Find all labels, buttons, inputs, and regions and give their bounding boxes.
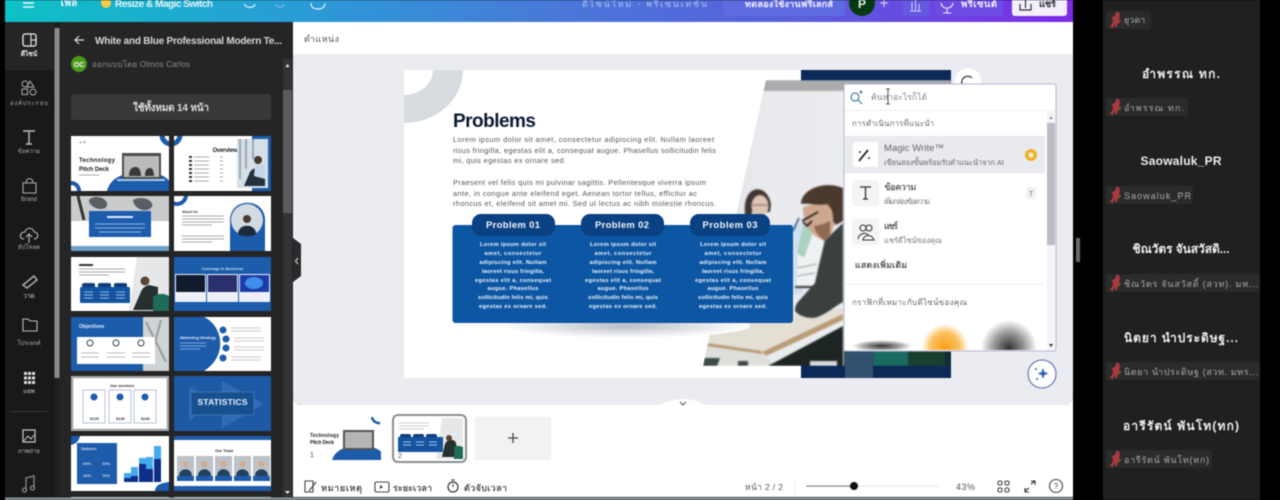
rail item: upload: [18, 228, 40, 251]
share button: [1012, 0, 1067, 16]
bottom bar background: [293, 405, 1073, 497]
bottom edge: [5, 498, 1073, 500]
thumbnail: statistics chart: 60%: [83, 461, 91, 466]
location bar: [293, 22, 1073, 54]
table: [707, 308, 843, 353]
card: problem 03: egestas elit a, consequat: [695, 278, 771, 284]
participants panel: [1103, 0, 1260, 500]
thumbnail: our services (selected): $120: [90, 416, 100, 421]
show more: แสดงเพิ่มเติม: [855, 258, 907, 270]
use all button: [71, 94, 271, 120]
card: problem 01: Problem 01: [486, 220, 541, 231]
top toolbar: [5, 0, 1073, 22]
thumbnail: technology pitch deck: Technology: [79, 158, 116, 164]
location label: ตำแหน่ง: [304, 34, 339, 44]
thumbnail: marketing strategy: Marketing Strategy: [180, 335, 217, 340]
participant name: amphan: อำพรรณ ทก.: [1142, 67, 1220, 81]
man working at desk: [795, 185, 843, 318]
card: problem 02: egestas elit a, consequat: [585, 278, 661, 284]
participant name: saowaluk: Saowaluk_PR: [1140, 154, 1222, 168]
magic menu: [844, 84, 1056, 376]
rail item: text: ข้อความ: [18, 148, 40, 155]
card: problem 01: augue. Phasellus: [488, 286, 538, 292]
card: problem 01: sollicitudin felis mi, quis: [478, 295, 548, 301]
menu item: share: แชร์ดีไซน์ของคุณ: [884, 236, 942, 245]
thumbnail: overview: Overview: [212, 148, 238, 154]
intro paragraphs: risus fringilla, egestas elit a, consequat augue. Phasellus sollicitudin felis: [453, 146, 716, 155]
rail item: draw: วาด: [23, 293, 35, 300]
card: problem 02: augue. Phasellus: [598, 286, 648, 292]
participant tag: nitaya: [1106, 362, 1260, 380]
duration: ระยะเวลา: [393, 483, 432, 493]
menu item: magic write: Magic Write™: [884, 143, 944, 154]
thumbnail: technology pitch deck: [70, 135, 170, 192]
rail item: brand: Brand: [21, 197, 37, 203]
avatar: [849, 0, 875, 16]
card: problem 03: sollicitudin felis mi, quis: [698, 295, 768, 301]
thumbnail: statistics chart: 20%: [83, 473, 91, 478]
icon: back arrow: [75, 36, 84, 44]
card: problem 03: egestas ex ornare sed.: [699, 304, 767, 310]
card: problem 03: [690, 214, 771, 310]
rail item: music: [22, 476, 34, 492]
thumbnail: marketing strategy: [173, 316, 272, 372]
thumbnails: next row: [71, 497, 271, 500]
rail item: photos: ภาพถ่าย: [18, 448, 40, 455]
icon: grid view: [998, 481, 1009, 492]
thumbnail: our team: [173, 435, 272, 492]
icon: undo: [244, 4, 255, 7]
thumbnail: about us: About Us: [182, 210, 198, 214]
side rail: [5, 22, 54, 500]
bottom toolbar right: [745, 478, 1062, 494]
icon: share: [1020, 0, 1031, 10]
card: problem 02: amet, consectetur: [594, 251, 652, 257]
thumbnail: coverage in business: [173, 256, 272, 312]
zoom percent: 43%: [956, 482, 975, 492]
thumbnail: coverage in business: Coverage In Business: [202, 266, 244, 271]
thumbnail: objectives: [70, 316, 170, 372]
graphic suggestions: [854, 321, 1036, 351]
thumbnail: introduction: [70, 195, 170, 252]
icon: menu: [23, 3, 34, 7]
notes: หมายเหตุ: [321, 483, 362, 494]
thumbnail: about us: [173, 195, 272, 252]
rail item: design: [21, 34, 38, 58]
thumbnail: statistics chart: 10%: [102, 461, 110, 466]
card: problem 02: Lorem ipsum dolor sit: [590, 242, 656, 248]
intro paragraphs: ante, in congue ante eleifend eget. Aenean tortor tellus, efficitur ac: [453, 189, 697, 198]
icon: plus: [880, 0, 888, 7]
card: problem 03: augue. Phasellus: [708, 286, 758, 292]
card: problem 02: Problem 02: [595, 220, 649, 231]
template title: White and Blue Professional Modern Te...: [95, 36, 282, 47]
participant tag: areerat: อารีรัตน์ พันโท(ทก): [1124, 454, 1209, 465]
page count: หน้า 2 / 2: [745, 482, 783, 492]
rail item: upload: อัปโหลด: [18, 243, 40, 251]
filmstrip: page 2 selected: [393, 415, 466, 462]
rail item: brand: [21, 178, 37, 203]
menu item: text: [852, 180, 1036, 206]
thumbnail: our services (selected): Our services: [110, 383, 135, 388]
card: problem 02: laoreet risus fringilla,: [592, 269, 654, 275]
card: problem 01: amet, consectetur: [484, 251, 542, 257]
template panel: [60, 22, 293, 500]
page chevron: [658, 399, 708, 405]
rail scrollbar: [54, 22, 60, 500]
bottom toolbar left: [305, 480, 507, 494]
duration: [375, 482, 432, 493]
participant tag: yuwada: ยุวดา: [1124, 15, 1145, 26]
magic assistant button: [1028, 360, 1056, 388]
participant name: areerat: อารีรัตน์ พันโท(ทก): [1123, 418, 1239, 433]
creator label: ออกแบบโดย Olmos Carlos: [92, 59, 190, 69]
menu item: magic write: เขียนสองขั้นพร้อมรับคำแนะนำจาก AI: [884, 157, 1004, 167]
thumbnail: statistics title: [173, 375, 272, 432]
problems panel: [452, 225, 793, 323]
zoom slider: [806, 482, 938, 490]
card: problem 03: laoreet risus fringilla,: [702, 269, 764, 275]
panel collapse handle: [293, 238, 301, 282]
card: problem 01: adipiscing elit. Nullam: [480, 260, 546, 266]
participant tag: yuwada: [1106, 11, 1151, 29]
menu item: share: [852, 219, 942, 245]
intro paragraphs: [453, 135, 716, 208]
card: problem 01: Lorem ipsum dolor sit: [480, 242, 546, 248]
thumbnail: technology pitch deck: ▲ Alt: [79, 140, 86, 144]
icon: help: ?: [1054, 482, 1059, 491]
woman in background: [743, 188, 772, 215]
participant tag: amphan: [1106, 98, 1188, 116]
card: problem 02: egestas ex ornare sed.: [589, 304, 657, 310]
intro paragraphs: rhoncus et, eleifend sit amet mi. Sed ut lectus ac nibh molestie rhoncus.: [453, 199, 716, 208]
thumbnail: our services (selected): $130: [116, 416, 126, 421]
menu scrollbar: [1047, 112, 1055, 350]
intro paragraphs: Praesent vel felis quis mi pulvinar sagittis. Pellentesque viverra ipsum: [453, 178, 706, 187]
thumbnail: our services (selected): $140: [141, 416, 151, 421]
papers and laptop: [788, 216, 818, 294]
decorative corner arc: [404, 70, 463, 123]
filmstrip: page 1: Technology: [310, 433, 339, 439]
rail item: design: ดีไซน์: [21, 49, 38, 58]
card: problem 02: adipiscing elit. Nullam: [590, 260, 656, 266]
icon: cloud saved: [311, 3, 325, 9]
rail item: draw: [23, 276, 37, 300]
intro paragraphs: Lorem ipsum dolor sit amet, consectetur adipiscing elit. Nullam laoreet: [453, 135, 714, 144]
participant tag: chinnawat: [1106, 274, 1260, 292]
card: problem 03: amet, consectetur: [704, 251, 762, 257]
rail item: apps: [23, 372, 35, 395]
slide navy backing: [801, 70, 951, 378]
card: problem 01: egestas elit a, consequat: [475, 278, 551, 284]
card: problem 02: [581, 214, 664, 310]
thumbnail: statistics chart: [70, 435, 170, 492]
rail item: photos: [18, 430, 40, 455]
card: problem 03: Problem 03: [702, 220, 758, 231]
photo bottom strip: [844, 351, 951, 366]
shadow under panel: [500, 314, 750, 338]
icon: fullscreen: [1025, 481, 1035, 492]
rail item: apps: แอพ: [23, 388, 35, 395]
participant tag: saowaluk: Saowaluk_PR: [1124, 191, 1192, 201]
cursor: [886, 89, 890, 104]
card: problem 03: adipiscing elit. Nullam: [700, 260, 766, 266]
rotate handle: [955, 68, 981, 94]
filmstrip: page 1: 1: [310, 452, 314, 459]
icon: magic search: [851, 91, 862, 104]
thumbnail: problems: [70, 256, 170, 312]
participant tag: nitaya: นิตยา นำประดิษฐ (สวท. มทร...: [1124, 367, 1258, 378]
filmstrip: page 1: [310, 416, 382, 461]
thumbnail: overview: [173, 135, 272, 192]
thumbnail: statistics chart: Statistics: [81, 447, 97, 451]
video panel handle: [1076, 238, 1080, 262]
thumbnail: statistics title: STATISTICS: [198, 397, 248, 407]
card: problem 02: sollicitudin felis mi, quis: [588, 295, 658, 301]
rail item: text: [18, 131, 40, 155]
recommended label: การดำเนินการที่แนะนำ: [852, 118, 934, 128]
participant name: nitaya: นิตยา นำประดิษฐ...: [1124, 331, 1238, 346]
rail item: elements: องค์ประกอบ: [10, 99, 48, 107]
filmstrip: add page: [475, 417, 551, 460]
participant tag: saowaluk: [1106, 186, 1193, 204]
graphics label: กราฟิกที่เหมาะกับดีไซน์ของคุณ: [852, 296, 968, 307]
filmstrip: page 1: Pitch Deck: [310, 440, 334, 446]
participant tag: amphan: อำพรรณ ทก.: [1124, 103, 1184, 113]
menu item: text: T: [1029, 191, 1034, 198]
card: problem 01: egestas ex ornare sed.: [479, 304, 547, 310]
filmstrip: page 2 selected: 2: [398, 453, 402, 460]
slide photo: [700, 80, 951, 366]
thumbnail: statistics chart: 70%: [102, 473, 110, 478]
notes: [305, 481, 362, 494]
shadow strip below menu: [845, 351, 873, 378]
thumbnail: our team: Our Team: [215, 448, 234, 453]
rail item: projects: [17, 319, 41, 347]
present button: [935, 0, 1003, 16]
card: problem 01: laoreet risus fringilla,: [482, 269, 544, 275]
trial button: [723, 0, 845, 16]
rail item: elements: [10, 81, 48, 107]
menu item: text: ข้อความ: [884, 182, 916, 192]
icon: present: [941, 3, 953, 13]
icon: help: [1050, 480, 1062, 492]
use all label: ใช้ทั้งหมด 14 หน้า: [133, 100, 209, 114]
thumbnail: technology pitch deck: Pitch Deck: [79, 167, 110, 173]
menu item: magic write: [845, 136, 1045, 173]
canvas area: [293, 54, 1073, 405]
participant name: chinnawat: ชิณวัตร จันสวัสดิ...: [1133, 242, 1230, 256]
menu item: share: แชร์: [884, 220, 898, 231]
slide: problems: [404, 70, 951, 378]
intro paragraphs: mi, quis egestas ex ornare sed.: [453, 156, 566, 165]
card: problem 01: [472, 214, 555, 310]
insights button: [902, 0, 929, 16]
participant tag: chinnawat: ชิณวัตร จันสวัสดิ์ (สวท). มท...: [1124, 277, 1258, 289]
card: problem 03: Lorem ipsum dolor sit: [700, 242, 766, 248]
panel scrollbar: [283, 59, 292, 500]
participant tag: areerat: [1106, 450, 1212, 468]
thumbnail: objectives: Objectives: [79, 324, 105, 330]
timer: ตัวจับเวลา: [464, 483, 507, 493]
timer: [448, 480, 507, 493]
rail item: projects: โปรเจกต์: [17, 339, 41, 347]
icon: redo: [275, 4, 284, 7]
creator avatar: [71, 56, 87, 72]
heading: Problems: [453, 111, 536, 132]
thumbnail: our services (selected): [70, 375, 170, 432]
creator initials: OC: [74, 62, 84, 69]
search placeholder: ค้นหาอะไรก็ได้: [871, 91, 927, 102]
menu item: text: เพิ่มกล่องข้อความ: [884, 196, 930, 206]
icon: crown coin: [101, 0, 111, 8]
